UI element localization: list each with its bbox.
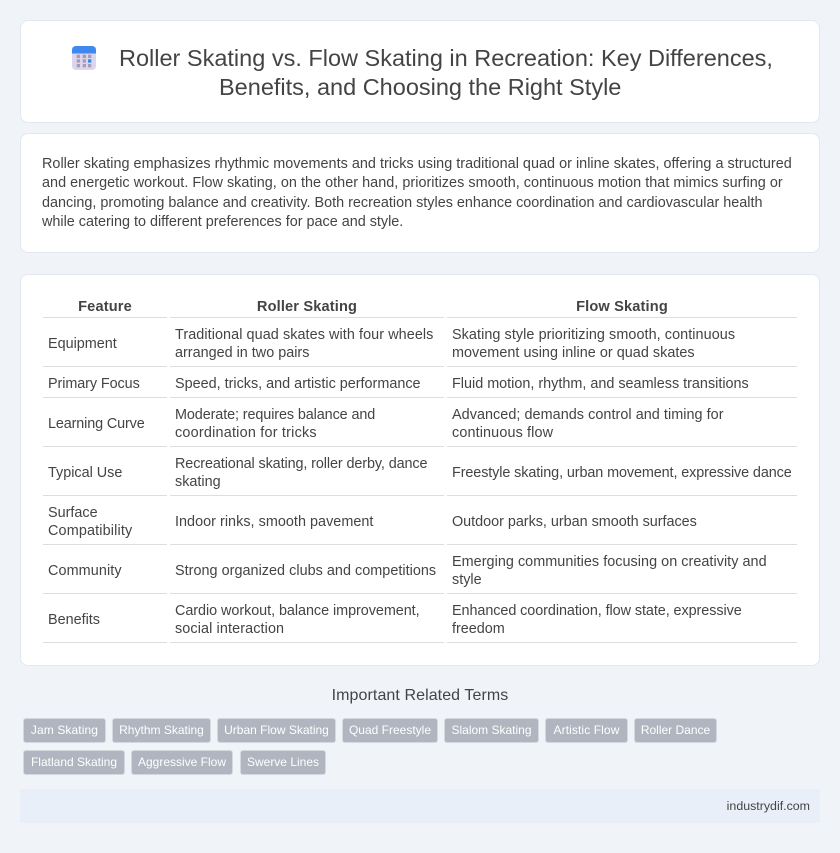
row: community xyxy=(48,554,767,588)
table header: Feature xyxy=(78,299,132,315)
intro paragraph: Roller skating emphasizes rhythmic movements and tricks using traditional quad or inline skates, offering a structured xyxy=(42,156,792,172)
row: learning curve: coordination for tricks xyxy=(175,425,317,441)
table header: Roller Skating xyxy=(257,299,357,315)
row: typical use: skating xyxy=(175,474,221,490)
icon: calendar xyxy=(72,46,96,70)
title: Roller Skating vs. Flow Skating in Recreation: Key Differences, xyxy=(119,45,773,71)
panel: introduction xyxy=(20,133,820,253)
row: community: Emerging communities focusing on creativity and xyxy=(452,554,767,570)
row: equipment: Traditional quad skates with four wheels xyxy=(175,327,433,343)
related term tags: Jam Skating xyxy=(31,723,98,737)
row: primary focus xyxy=(48,376,749,392)
table header: Flow Skating xyxy=(576,299,668,315)
row: equipment: arranged in two pairs xyxy=(175,345,309,361)
row: equipment: movement using inline or quad skates xyxy=(452,345,695,361)
row: surface compatibility: Compatibility xyxy=(48,523,132,539)
related term tags xyxy=(23,718,717,775)
row: learning curve: continuous flow xyxy=(452,425,553,441)
row: surface compatibility: Outdoor parks, urban smooth surfaces xyxy=(452,514,697,530)
title: Benefits, and Choosing the Right Style xyxy=(219,74,621,100)
related term tags: Roller Dance xyxy=(641,723,710,737)
related term tags: Flatland Skating xyxy=(31,755,117,769)
related term tags: Artistic Flow xyxy=(554,723,619,737)
row: benefits: social interaction xyxy=(175,621,284,637)
related term tags: Rhythm Skating xyxy=(119,723,204,737)
title xyxy=(119,45,773,100)
row: learning curve xyxy=(48,407,724,441)
table header xyxy=(78,299,668,315)
row: surface compatibility xyxy=(48,505,697,539)
row: community: Strong organized clubs and competitions xyxy=(175,563,436,579)
row: primary focus: Fluid motion, rhythm, and seamless transitions xyxy=(452,376,749,392)
row: equipment: Skating style prioritizing smooth, continuous xyxy=(452,327,735,343)
row: benefits: Benefits xyxy=(48,612,100,628)
row: benefits: Enhanced coordination, flow state, expressive xyxy=(452,603,742,619)
related term tags: Urban Flow Skating xyxy=(224,723,329,737)
row: surface compatibility: Surface xyxy=(48,505,98,521)
row: primary focus: Primary Focus xyxy=(48,376,140,392)
row: benefits: freedom xyxy=(452,621,505,637)
row: community: Community xyxy=(48,563,122,579)
related term tags: Quad Freestyle xyxy=(349,723,431,737)
row: primary focus: Speed, tricks, and artistic performance xyxy=(175,376,421,392)
related term tags: Swerve Lines xyxy=(247,755,319,769)
row: equipment: Equipment xyxy=(48,336,117,352)
row: benefits: Cardio workout, balance improvement, xyxy=(175,603,420,619)
row: learning curve: Advanced; demands control and timing for xyxy=(452,407,724,423)
intro paragraph: and energetic workout. Flow skating, on the other hand, prioritizes smooth, continuous motion that mimics surfing or xyxy=(42,175,783,191)
intro paragraph: dancing, promoting balance and creativity. Both recreation styles enhance coordination and cardiovascular health xyxy=(42,195,763,211)
panel: comparison table xyxy=(20,274,820,666)
row: equipment xyxy=(48,327,735,361)
related terms heading: Important Related Terms xyxy=(332,687,508,704)
row: benefits xyxy=(48,603,742,637)
row: learning curve: Moderate; requires balance and xyxy=(175,407,375,423)
footer bar xyxy=(20,789,820,823)
row: typical use xyxy=(48,456,792,490)
row: typical use: Recreational skating, roller derby, dance xyxy=(175,456,427,472)
intro paragraph: while catering to different preferences for pace and style. xyxy=(42,214,403,230)
row: community: style xyxy=(452,572,482,588)
row: learning curve: Learning Curve xyxy=(48,416,145,432)
footer source text: industrydif.com xyxy=(727,799,810,813)
row: typical use: Freestyle skating, urban movement, expressive dance xyxy=(452,465,792,481)
related term tags: Slalom Skating xyxy=(451,723,532,737)
row: typical use: Typical Use xyxy=(48,465,122,481)
row: surface compatibility: Indoor rinks, smooth pavement xyxy=(175,514,373,530)
related term tags: Aggressive Flow xyxy=(138,755,226,769)
intro paragraph xyxy=(42,156,792,230)
header panel xyxy=(20,20,820,123)
